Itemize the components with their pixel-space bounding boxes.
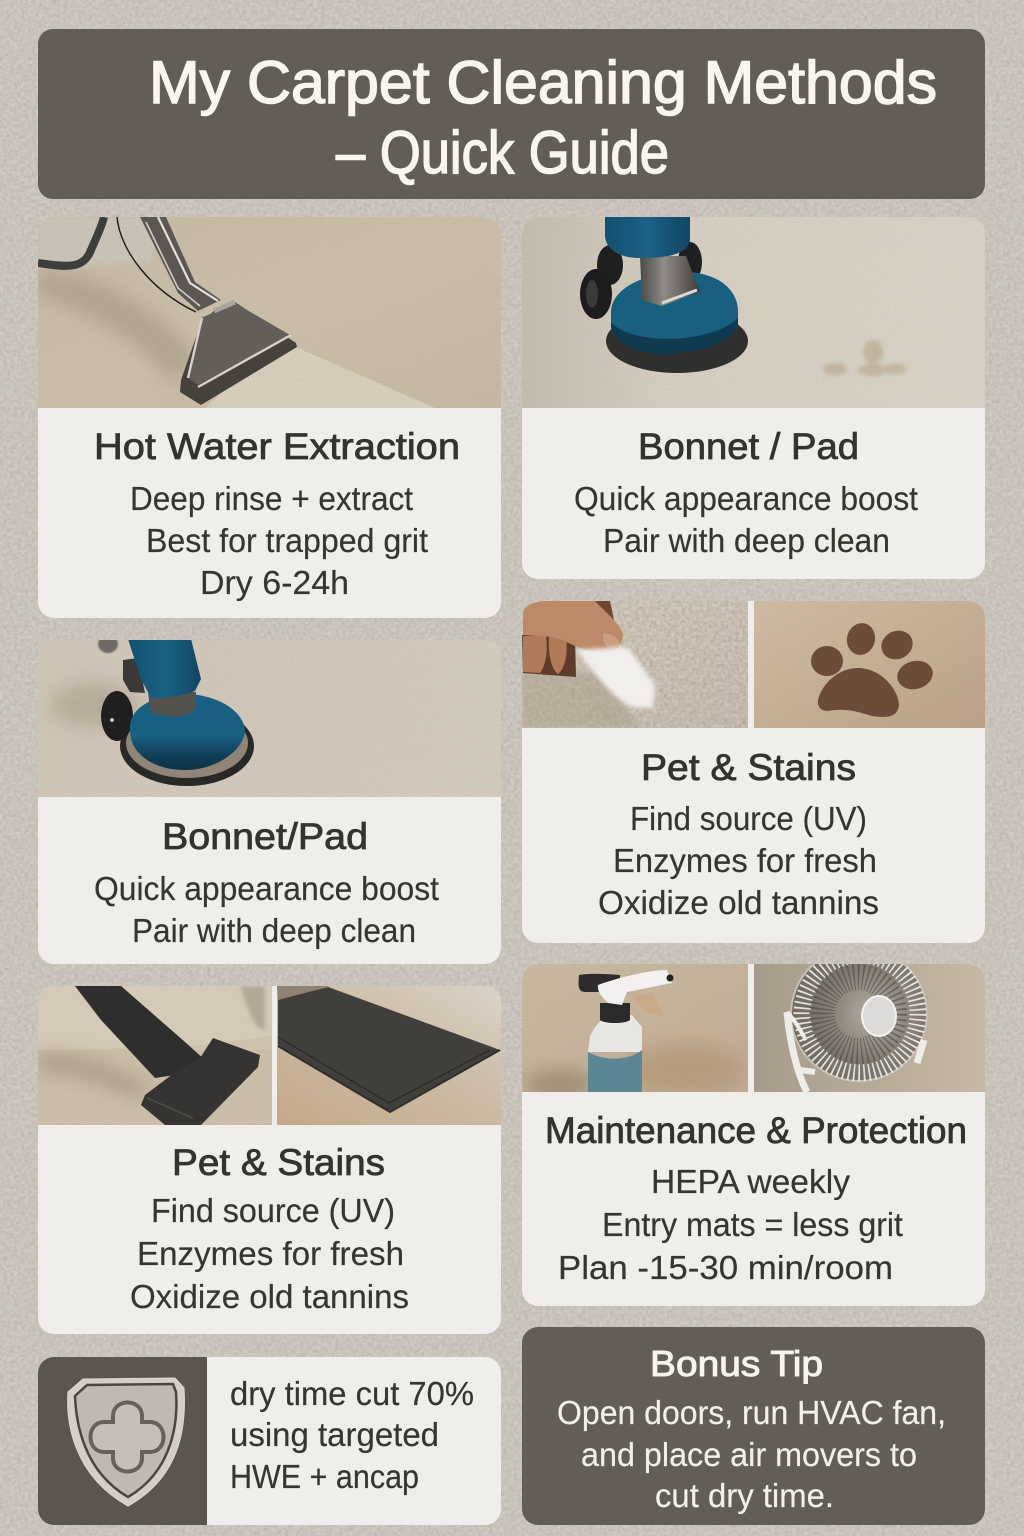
photo: hand blotting carpet xyxy=(522,601,748,728)
panel: pet and stains left xyxy=(38,986,501,1334)
body text: Quick appearance boost xyxy=(94,870,439,907)
panel: bonnet/pad left xyxy=(38,635,501,964)
heading: Bonnet / Pad xyxy=(638,426,859,467)
callout text: HWE + ancap xyxy=(230,1458,419,1495)
body text: HEPA weekly xyxy=(651,1163,850,1200)
body text: Find source (UV) xyxy=(630,800,867,837)
photo: bonnet machine on clean carpet xyxy=(38,635,501,797)
panel: maintenance and protection xyxy=(522,947,985,1306)
title text xyxy=(149,49,937,186)
body text: Oxidize old tannins xyxy=(598,884,879,921)
icon: paw print xyxy=(811,620,936,717)
body text: Entry mats = less grit xyxy=(602,1206,903,1243)
body text: Find source (UV) xyxy=(151,1192,395,1229)
body text: Pair with deep clean xyxy=(603,522,890,559)
heading: Pet & Stains xyxy=(641,747,856,788)
panel: bonus tip xyxy=(522,1327,985,1525)
photo: vacuum head on carpet xyxy=(38,986,272,1125)
icon: shield with cross xyxy=(68,1378,184,1506)
callout text: dry time cut 70% xyxy=(230,1375,474,1412)
body text: Best for trapped grit xyxy=(146,522,428,559)
body text xyxy=(130,480,428,601)
bonus heading: Bonus Tip xyxy=(650,1343,823,1384)
bonus text: and place air movers to xyxy=(581,1436,917,1473)
body text: Pair with deep clean xyxy=(132,912,416,949)
title banner xyxy=(38,29,985,199)
callout text: using targeted xyxy=(230,1416,439,1453)
bonus text: cut dry time. xyxy=(655,1477,834,1514)
body text xyxy=(558,1163,903,1286)
photo: spray bottle on carpet xyxy=(522,964,748,1100)
photo: extraction wand on carpet xyxy=(38,217,501,408)
body text: Dry 6-24h xyxy=(200,564,349,601)
body text xyxy=(94,870,439,949)
body text xyxy=(130,1192,409,1315)
photo: entry mat on wood floor xyxy=(277,986,501,1125)
bonus text: Open doors, run HVAC fan, xyxy=(557,1394,946,1431)
panel: bonnet / pad right xyxy=(522,217,985,579)
title text: My Carpet Cleaning Methods xyxy=(149,49,937,116)
title text: – Quick Guide xyxy=(336,119,669,186)
body text: Enzymes for fresh xyxy=(613,842,877,879)
body text: Oxidize old tannins xyxy=(130,1278,409,1315)
heading: Bonnet/Pad xyxy=(162,816,368,857)
body text: Plan -15-30 min/room xyxy=(558,1249,893,1286)
body text xyxy=(598,800,879,921)
body text: Deep rinse + extract xyxy=(130,480,413,517)
bonus text xyxy=(557,1394,946,1514)
body text: Enzymes for fresh xyxy=(137,1235,404,1272)
body text: Quick appearance boost xyxy=(574,480,918,517)
panel: hot water extraction xyxy=(38,217,501,618)
photo: paw print stain xyxy=(754,601,985,728)
panel: pet and stains right xyxy=(522,601,985,943)
photo: bonnet machine with faint stain xyxy=(522,217,985,408)
heading: Pet & Stains xyxy=(172,1142,385,1183)
callout text xyxy=(230,1375,474,1495)
heading: Maintenance & Protection xyxy=(545,1110,967,1151)
heading: Hot Water Extraction xyxy=(94,426,460,467)
photo: small air mover fan xyxy=(754,964,985,1092)
panel: dry time callout xyxy=(38,1357,501,1525)
body text xyxy=(574,480,918,559)
